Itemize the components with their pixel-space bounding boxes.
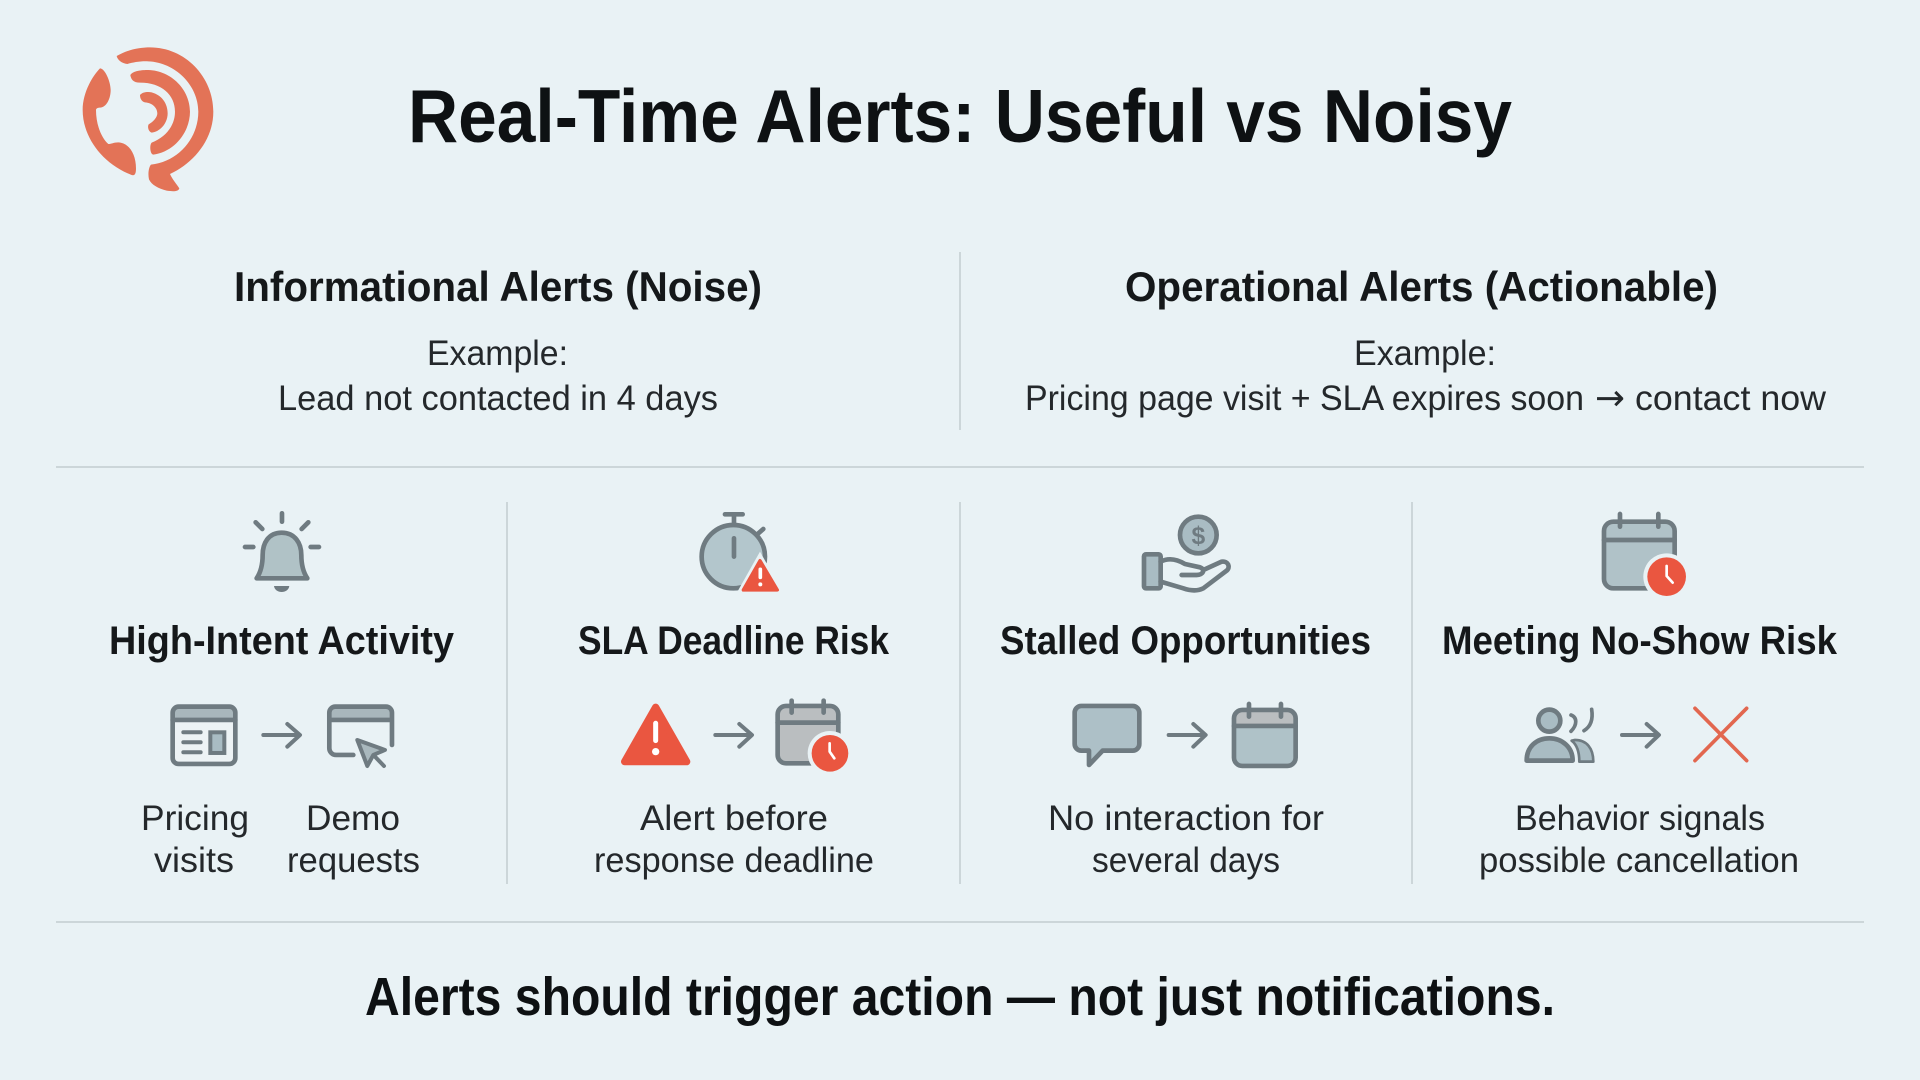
icon: calendar with clock [778,701,852,776]
text: no interaction for several days: several days [1092,841,1280,880]
panel: high-intent activity [109,513,455,880]
heading: informational alerts: Informational Alerts (Noise) [234,263,762,310]
icon: hand with coin [1144,517,1229,590]
text: behavior signals possible cancellation [1479,799,1799,880]
heading: meeting no-show risk: Meeting No-Show Risk [1442,619,1838,663]
icon: demo request window [329,707,392,766]
text: no interaction for several days [1048,799,1324,880]
panel: informational alerts [234,263,762,418]
icon: phone and signal logo [83,47,213,191]
text: operational example [1025,378,1827,419]
text: demo requests [287,799,420,880]
panel: SLA deadline risk [578,514,890,880]
arrow [263,724,300,747]
text: operational example: contact now [1635,379,1827,418]
icon: hand with coin: $ [1191,523,1205,550]
text: operational example: Pricing page visit + SLA expires soon [1025,379,1584,418]
text: demo requests: Demo [306,799,400,838]
icon: speech bubble [1075,706,1139,765]
icon: people talking [1527,709,1593,762]
title: Real-Time Alerts: Useful vs Noisy [408,74,1512,158]
text: informational example label: Example: [427,334,568,373]
panel: stalled opportunities [1000,517,1371,880]
arrow [1622,724,1659,747]
panel: meeting no-show risk [1442,514,1838,880]
text: pricing visits: visits [154,841,234,880]
footer takeaway: Alerts should trigger action — not just notifications. [365,967,1555,1027]
text: informational example: Lead not contacted in 4 days [278,379,718,418]
panel: operational alerts [1025,263,1827,419]
arrow [715,724,752,747]
icon: calendar with clock [1604,514,1690,600]
text: no interaction for several days: No interaction for [1048,799,1324,838]
text: pricing visits [141,799,249,880]
icon: red cross [1695,708,1747,761]
heading: stalled opportunities: Stalled Opportunities [1000,619,1371,663]
icon: calendar [1234,704,1296,766]
text: alert before response deadline [594,799,874,880]
text: demo requests: requests [287,841,420,880]
arrow [1169,724,1206,747]
heading: operational alerts: Operational Alerts (Actionable) [1125,263,1718,310]
text: operational example: → [1595,378,1625,419]
icon: stopwatch with warning [702,514,785,596]
icon: warning triangle [625,707,687,762]
text: pricing visits: Pricing [141,799,249,838]
text: operational example label: Example: [1354,334,1496,373]
heading: high-intent activity: High-Intent Activity [109,619,455,663]
icon: pricing page [173,707,235,764]
heading: SLA deadline risk: SLA Deadline Risk [578,619,890,663]
text: behavior signals possible cancellation: Behavior signals [1515,799,1765,838]
icon: bell [245,513,319,592]
text: alert before response deadline: response deadline [594,841,874,880]
text: alert before response deadline: Alert before [640,799,828,838]
text: behavior signals possible cancellation: possible cancellation [1479,841,1799,880]
